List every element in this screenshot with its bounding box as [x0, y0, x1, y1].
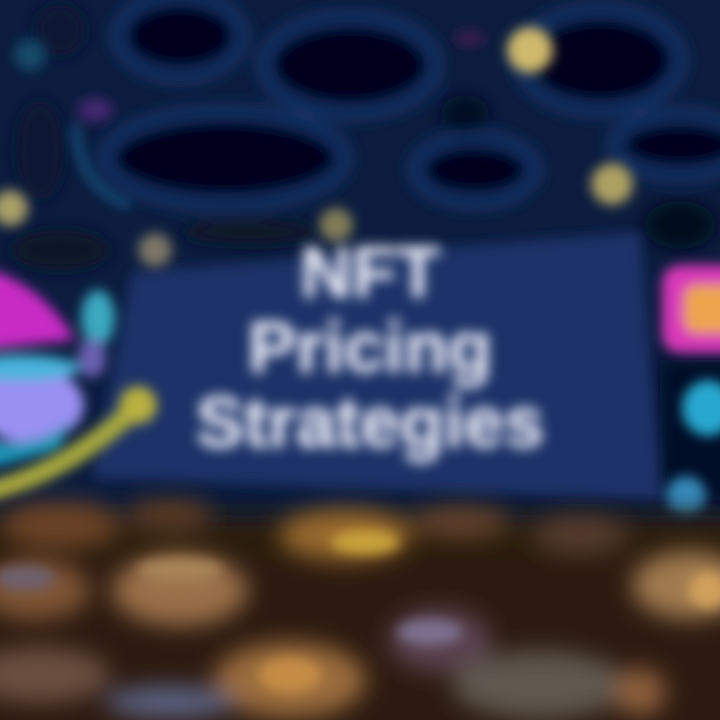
title [190, 233, 551, 473]
crowd foreground [0, 515, 720, 635]
icon: golden orbs [0, 27, 633, 267]
panel: title banner [92, 232, 662, 500]
icon: colorful sphere left [0, 266, 115, 470]
icon: colorful shapes right [662, 265, 720, 516]
network backdrop [0, 0, 720, 540]
arrow: yellow-green curve [0, 386, 157, 494]
crowd highlights [0, 530, 720, 693]
title: Strategies [196, 383, 544, 463]
title: NFT [300, 233, 440, 313]
accents in network [14, 30, 486, 205]
title: Pricing [248, 308, 492, 388]
